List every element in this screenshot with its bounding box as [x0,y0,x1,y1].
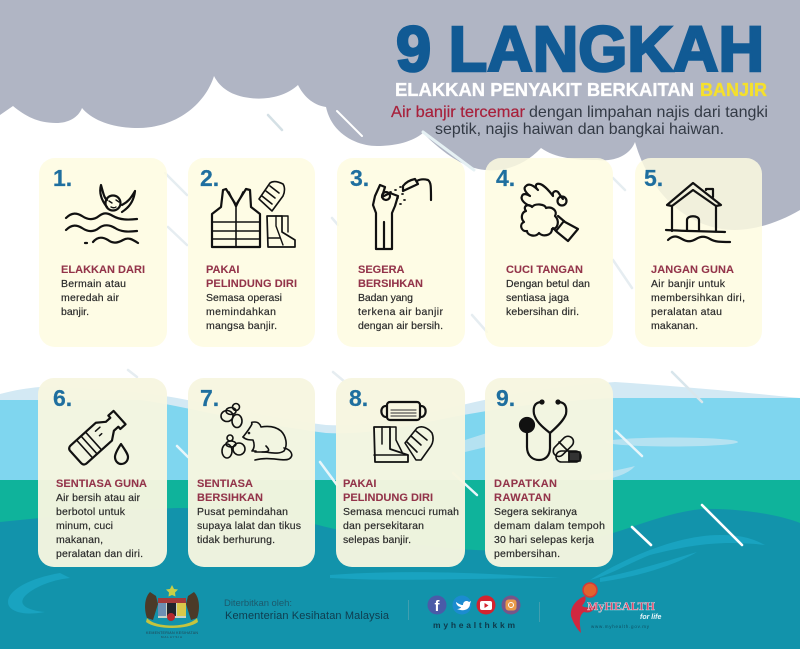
step 7 text [197,478,301,546]
subtitle: ELAKKAN PENYAKIT BERKAITAN [395,80,694,100]
icon: drowning person [66,185,138,243]
icon: vest, glove and boots [212,181,295,247]
card 4 [485,158,613,347]
card 8: 8. [349,385,368,411]
card 2: 2. [200,165,219,191]
step 9 text: pembersihan. [494,548,560,560]
icon: Malaysian coat of arms: KEMENTERIAN KESIHATAN [146,631,198,635]
publisher text [224,598,390,622]
step 2 text: PELINDUNG DIRI [206,278,297,290]
step 8 text: PAKAI [343,478,376,490]
step 3 text: Badan yang [358,292,413,304]
step 1 text: meredah air [61,292,120,304]
step 5 text: peralatan atau [651,306,722,318]
step 6 text: berbotol untuk [56,506,126,518]
intro text [391,104,768,138]
social icons: myhealthkkm [433,620,515,630]
step 3 text: terkena air banjir [358,306,444,318]
step 6 text [56,478,147,560]
step 2 text [206,264,297,332]
step 9 text [494,478,605,560]
intro text: septik, najis haiwan dan bangkai haiwan. [435,121,724,138]
icon: water bottle and drop [68,409,128,466]
step 2 text: mangsa banjir. [206,320,277,332]
icon: stethoscope and pills [520,400,581,462]
step 1 text: banjir. [61,306,89,318]
social icons: f [434,598,440,615]
footer [145,583,661,639]
icon: mask, boots and gloves [374,402,433,462]
step 4 text [506,264,590,318]
publisher text: Kementerian Kesihatan Malaysia [225,610,390,622]
card 3: 3. [350,165,369,191]
icon: Malaysian coat of arms: MALAYSIA [161,635,182,639]
step 3 text: dengan air bersih. [358,320,443,332]
card 5 [635,158,762,347]
step 6 text: minum, cuci [56,520,113,532]
step 9 text: 30 hari selepas kerja [494,534,594,546]
step 9 text: demam dalam tempoh [494,520,605,532]
icon: washing hands [521,184,578,241]
step 2 text: PAKAI [206,264,239,276]
logo: MyHealth: for life [640,614,661,621]
card 5: 5. [644,165,663,191]
card 8 [336,378,465,567]
step 1 text [61,264,145,318]
icon: flies and rat [221,404,292,460]
step 5 text [651,264,745,332]
card 9 [485,378,613,567]
card 3 [337,158,465,347]
step 7 text: supaya lalat dan tikus [197,520,301,532]
card 7 [188,378,315,567]
logo: MyHealth [571,583,661,633]
icon: person showering [373,179,431,249]
step 6 text: Air bersih atau air [56,492,140,504]
card 6: 6. [53,385,72,411]
intro text: dengan limpahan najis dari tangki [529,104,768,121]
step 2 text: Semasa operasi [206,292,282,304]
card 2 [188,158,315,347]
step 7 text: Pusat pemindahan [197,506,288,518]
step 8 text: Semasa mencuci rumah [343,506,459,518]
step 3 text: SEGERA [358,264,405,276]
step 9 text: Segera sekiranya [494,506,577,518]
card 4: 4. [496,165,515,191]
step 7 text: tidak berhurung. [197,534,275,546]
rain streaks [128,111,742,545]
icon: Malaysian coat of arms [145,585,199,639]
step 7 text: BERSIHKAN [197,492,263,504]
step 6 text: SENTIASA GUNA [56,478,147,490]
step 6 text: peralatan dan diri. [56,548,143,560]
step 4 text: CUCI TANGAN [506,264,583,276]
subtitle: BANJIR [700,80,767,100]
title: 9 LANGKAH [396,13,764,85]
step 8 text: selepas banjir. [343,534,411,546]
card 1 [39,158,167,347]
card 9: 9. [496,385,515,411]
card 7: 7. [200,385,219,411]
card 1: 1. [53,165,72,191]
step 1 text: Bermain atau [61,278,126,290]
step 8 text: dan persekitaran [343,520,424,532]
step 7 text: SENTIASA [197,478,253,490]
step 5 text: Air banjir untuk [651,278,726,290]
step 6 text: makanan, [56,534,103,546]
step 4 text: kebersihan diri. [506,306,579,318]
step 5 text: makanan. [651,320,698,332]
icon: flooded house [666,183,730,242]
publisher text: Diterbitkan oleh: [224,598,292,609]
logo: MyHealth: www.myhealth.gov.my [591,624,650,629]
step 9 text: DAPATKAN [494,478,557,490]
step 8 text [343,478,459,546]
step 8 text: PELINDUNG DIRI [343,492,433,504]
step 4 text: sentiasa jaga [506,292,569,304]
step 4 text: Dengan betul dan [506,278,590,290]
card 6 [38,378,167,567]
step 3 text: BERSIHKAN [358,278,423,290]
step 2 text: memindahkan [206,306,276,318]
storm cloud [0,0,800,230]
logo: MyHealth: MyHEALTH [587,601,655,613]
step 9 text: RAWATAN [494,492,551,504]
step 5 text: membersihkan diri, [651,292,745,304]
step 5 text: JANGAN GUNA [651,264,734,276]
intro text: Air banjir tercemar [391,104,526,121]
step 3 text [358,264,444,332]
step 1 text: ELAKKAN DARI [61,264,145,276]
social icons [428,596,520,630]
